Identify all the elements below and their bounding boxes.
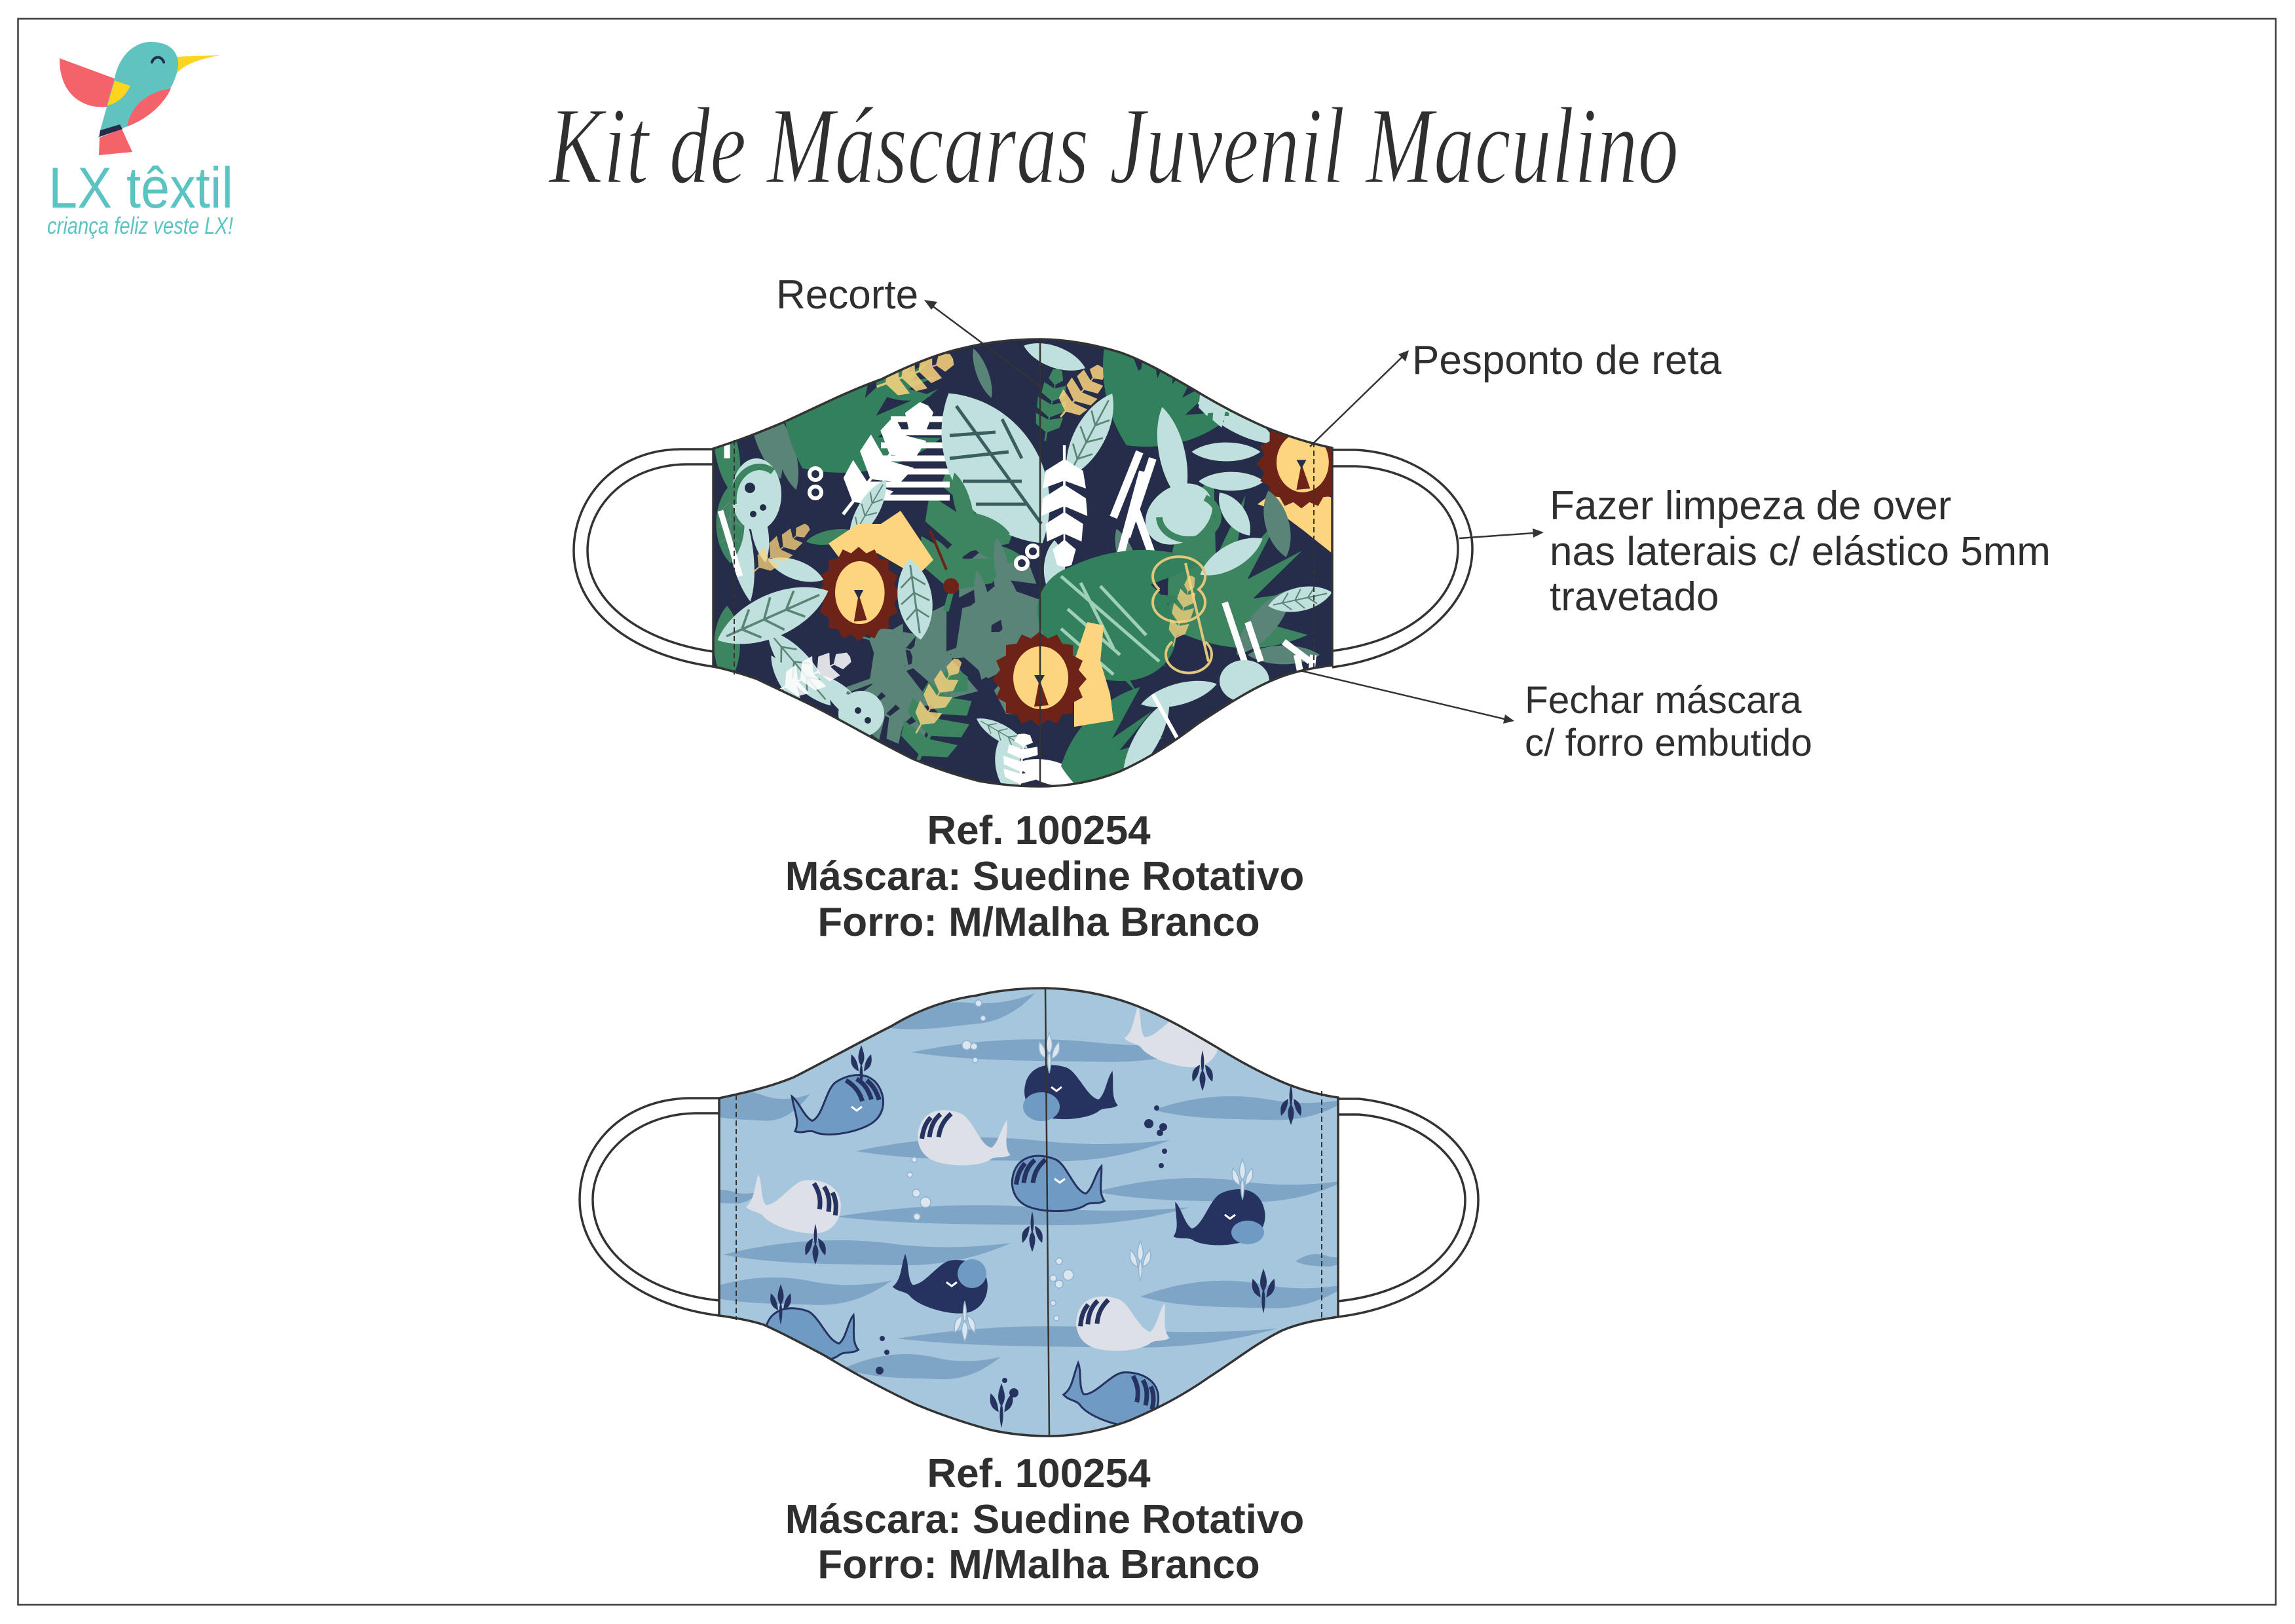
waves: [692, 990, 1350, 1379]
callout: fechar máscara: Fechar máscara: [1525, 679, 1802, 722]
callout: fechar máscara: [1300, 671, 1812, 764]
callout: Recorte: Recorte: [776, 272, 918, 318]
text block: jungle mask reference: Máscara: Suedine Rotativo: [785, 854, 1304, 899]
callout: limpeza de over: nas laterais c/ elástico 5mm: [1550, 529, 2051, 574]
panel: whale print mask: [580, 982, 1478, 1441]
stitch lines: [736, 1091, 1322, 1320]
text block: jungle mask reference: [785, 808, 1304, 945]
text block: whale mask reference: [785, 1451, 1304, 1587]
callout: limpeza de over: [1459, 483, 2051, 619]
peeking eyes: [810, 468, 1039, 569]
title: Kit de Máscaras Juvenil Maculino: [548, 85, 1679, 207]
mask outline: [713, 339, 1332, 786]
text block: jungle mask reference: Ref. 100254: [927, 808, 1151, 853]
lion: [1074, 622, 1113, 727]
stitch lines: [734, 440, 1314, 674]
callout: Pesponto de reta: [1310, 338, 1722, 447]
panel: jungle print mask: [572, 338, 1474, 788]
jungle fabric pattern: [714, 341, 1331, 786]
lion: [1258, 496, 1331, 553]
centre seam: [1045, 988, 1049, 1436]
text block: whale mask reference: Forro: M/Malha Branco: [817, 1542, 1260, 1587]
centre seam: [1039, 339, 1041, 786]
callout: limpeza de over: travetado: [1550, 574, 1719, 619]
mask outline: [719, 988, 1338, 1436]
water spouts: [770, 1045, 1301, 1428]
text block: whale mask reference: Máscara: Suedine Rotativo: [785, 1497, 1304, 1542]
logo name: LX têxtil: [48, 155, 233, 220]
text block: whale mask reference: Ref. 100254: [927, 1451, 1151, 1496]
icon: hummingbird: [60, 42, 221, 155]
callout: Recorte: [776, 272, 1039, 386]
elastic straps: [574, 449, 1472, 667]
callout: fechar máscara: c/ forro embutido: [1525, 722, 1812, 764]
background foliage: [707, 384, 1348, 830]
elastic straps: [580, 1098, 1478, 1317]
callout: Pesponto de reta: Pesponto de reta: [1412, 338, 1722, 383]
lion: [829, 511, 933, 576]
logo: LX têxtil: [47, 42, 233, 239]
whale fabric pattern: [692, 982, 1350, 1441]
text block: jungle mask reference: Forro: M/Malha Branco: [817, 900, 1260, 945]
callout: limpeza de over: Fazer limpeza de over: [1550, 483, 1951, 528]
whales: [743, 1003, 1269, 1431]
logo tagline: criança feliz veste LX!: [47, 212, 233, 239]
bubbles: [907, 1000, 1073, 1321]
